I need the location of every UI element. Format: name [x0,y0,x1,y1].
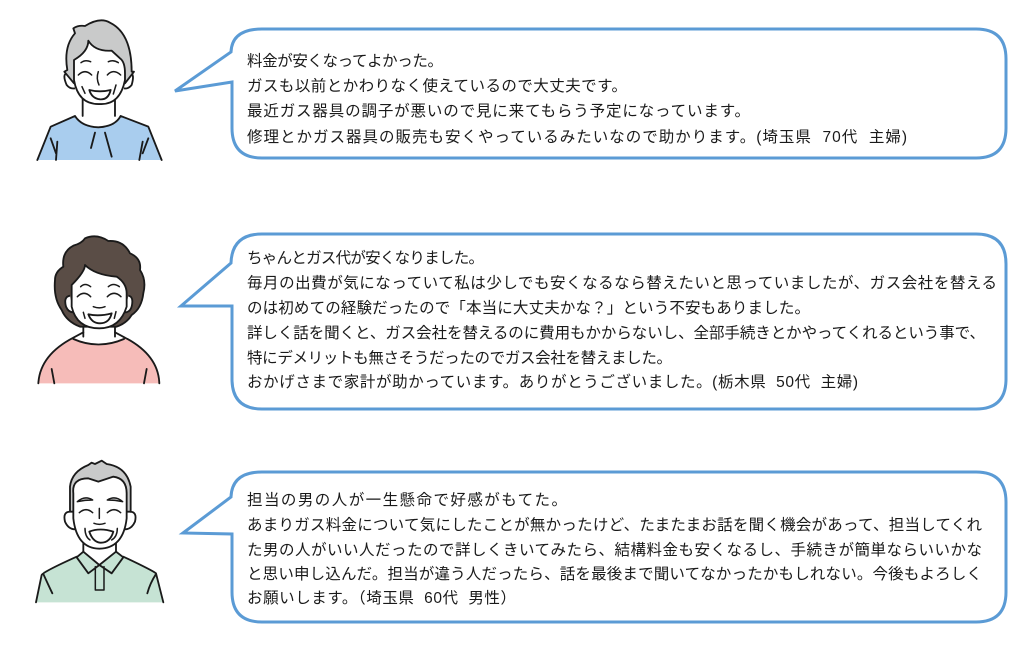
testimonial text 2: ちゃんとガス代が安くなりました。 [247,249,484,267]
testimonial text 1: 最近ガス器具の調子が悪いので見に来てもらう予定になっています。 [247,102,750,120]
testimonial text 1: 料金が安くなってよかった。 [247,52,443,70]
testimonial text 3 [247,491,982,607]
testimonial text 1: 修理とかガス器具の販売も安くやっているみたいなので助かります。(埼玉県 70代 主婦) [247,128,907,146]
bubble outline with tail [183,472,1006,622]
speech bubble 1 [175,29,1006,158]
testimonial text 3: た男の人がいい人だったので詳しくきいてみたら、結構料金も安くなるし、手続きが簡単ならいいかな [247,541,982,559]
speech bubble 3 [183,472,1006,622]
testimonial text 3: あまりガス料金について気にしたことが無かったけど、たまたまお話を聞く機会があって、担当してくれ [247,516,982,534]
testimonial text 2: おかげさまで家計が助かっています。ありがとうございました。(栃木県 50代 主婦) [247,372,858,391]
bubble outline with tail [175,29,1006,158]
testimonial text 2: のは初めての経験だったので「本当に大丈夫かな？」という不安もありました。 [247,299,810,317]
testimonial text 3: と思い申し込んだ。担当が違う人だったら、話を最後まで聞いてなかったかもしれない。今後もよろしく [247,565,982,583]
bubble outline with tail [181,234,1006,409]
testimonial text 2: 毎月の出費が気になっていて私は少しでも安くなるなら替えたいと思っていましたが、ガス会社を替える [247,274,997,292]
testimonial text 2 [247,249,997,391]
testimonial text 2: 特にデメリットも無さそうだったのでガス会社を替えました。 [247,348,672,367]
person 2: woman with dark curly hair and pink shirt [38,236,159,383]
testimonial text 1: ガスも以前とかわりなく使えているので大丈夫です。 [247,77,627,95]
testimonial text 3: 担当の男の人が一生懸命で好感がもてた。 [247,491,567,509]
person 1: woman with grey hair and blue shirt [37,20,162,160]
person 3: older man with grey hair and green polo shirt [36,461,163,602]
testimonial text 1 [247,52,907,146]
speech bubble 2 [181,234,1006,409]
testimonial text 3: お願いします。（埼玉県 60代 男性） [247,589,516,607]
testimonial text 2: 詳しく話を聞くと、ガス会社を替えるのに費用もかからないし、全部手続きとかやってくれるという事で、 [247,324,985,342]
